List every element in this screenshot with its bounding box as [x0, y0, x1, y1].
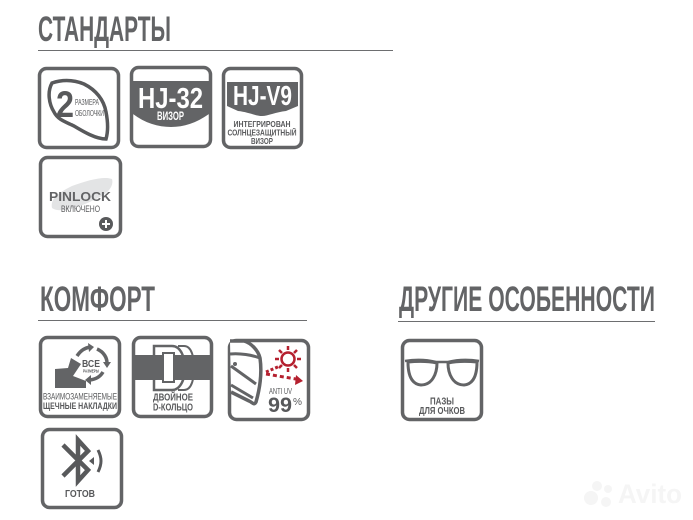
icon: double D-ring: ДВОЙНОЕ	[153, 390, 193, 404]
icon: Pinlock included: PINLOCK	[49, 189, 112, 204]
icon: double D-ring	[133, 338, 212, 416]
icon: HJ-32 visor	[132, 68, 210, 146]
icon: HJ-V9 integrated sun visor: HJ-V9	[233, 80, 292, 111]
icon: interchangeable cheek pads: ВСЕ	[82, 358, 100, 370]
icon: anti UV 99%	[230, 340, 308, 420]
icon: double D-ring: D-КОЛЬЦО	[153, 402, 193, 414]
icon: HJ-32 visor: HJ-32	[138, 83, 203, 115]
icon: glasses grooves: ПАЗЫ	[430, 396, 454, 408]
icon: glasses grooves: ДЛЯ ОЧКОВ	[419, 406, 465, 417]
icon: HJ-V9 integrated sun visor: ИНТЕГРИРОВАН	[234, 119, 290, 129]
icon: interchangeable cheek pads	[40, 338, 120, 416]
icon: 2 shell sizes	[40, 68, 118, 148]
icon: interchangeable cheek pads: ВЗАИМОЗАМЕНЯЕМЫЕ	[43, 392, 117, 402]
watermark: Avito	[584, 479, 682, 509]
icon: HJ-V9 integrated sun visor: СОЛНЦЕЗАЩИТНЫЙ	[228, 126, 296, 138]
heading: standards: СТАНДАРТЫ	[38, 10, 171, 49]
icon: anti UV 99%: 99	[268, 394, 292, 417]
icon: anti UV 99%: %	[293, 397, 302, 408]
icon: glasses grooves	[402, 340, 482, 420]
icon: 2 shell sizes: РАЗМЕРА	[75, 97, 99, 107]
icon: Bluetooth ready	[42, 430, 122, 508]
icon: HJ-V9 integrated sun visor: ВИЗОР	[251, 136, 273, 146]
watermark: Avito: Avito	[618, 479, 682, 509]
icon: Pinlock included: ВКЛЮЧЕНО	[61, 204, 100, 215]
icon: 2 shell sizes: 2	[56, 84, 74, 125]
icon: Pinlock included	[40, 158, 120, 236]
icon: HJ-V9 integrated sun visor	[224, 68, 302, 148]
icon: 2 shell sizes: ОБОЛОЧКИ	[75, 108, 104, 118]
icon: HJ-32 visor: ВИЗОР	[157, 109, 184, 123]
icon: interchangeable cheek pads: ЩЕЧНЫЕ НАКЛАДКИ	[43, 401, 117, 412]
icon: Bluetooth ready: ГОТОВ	[65, 488, 95, 500]
icon: interchangeable cheek pads: РАЗМЕРЫ	[83, 368, 99, 374]
heading: comfort: КОМФОРТ	[40, 280, 155, 319]
icon: anti UV 99%: ANTI UV	[269, 386, 292, 396]
